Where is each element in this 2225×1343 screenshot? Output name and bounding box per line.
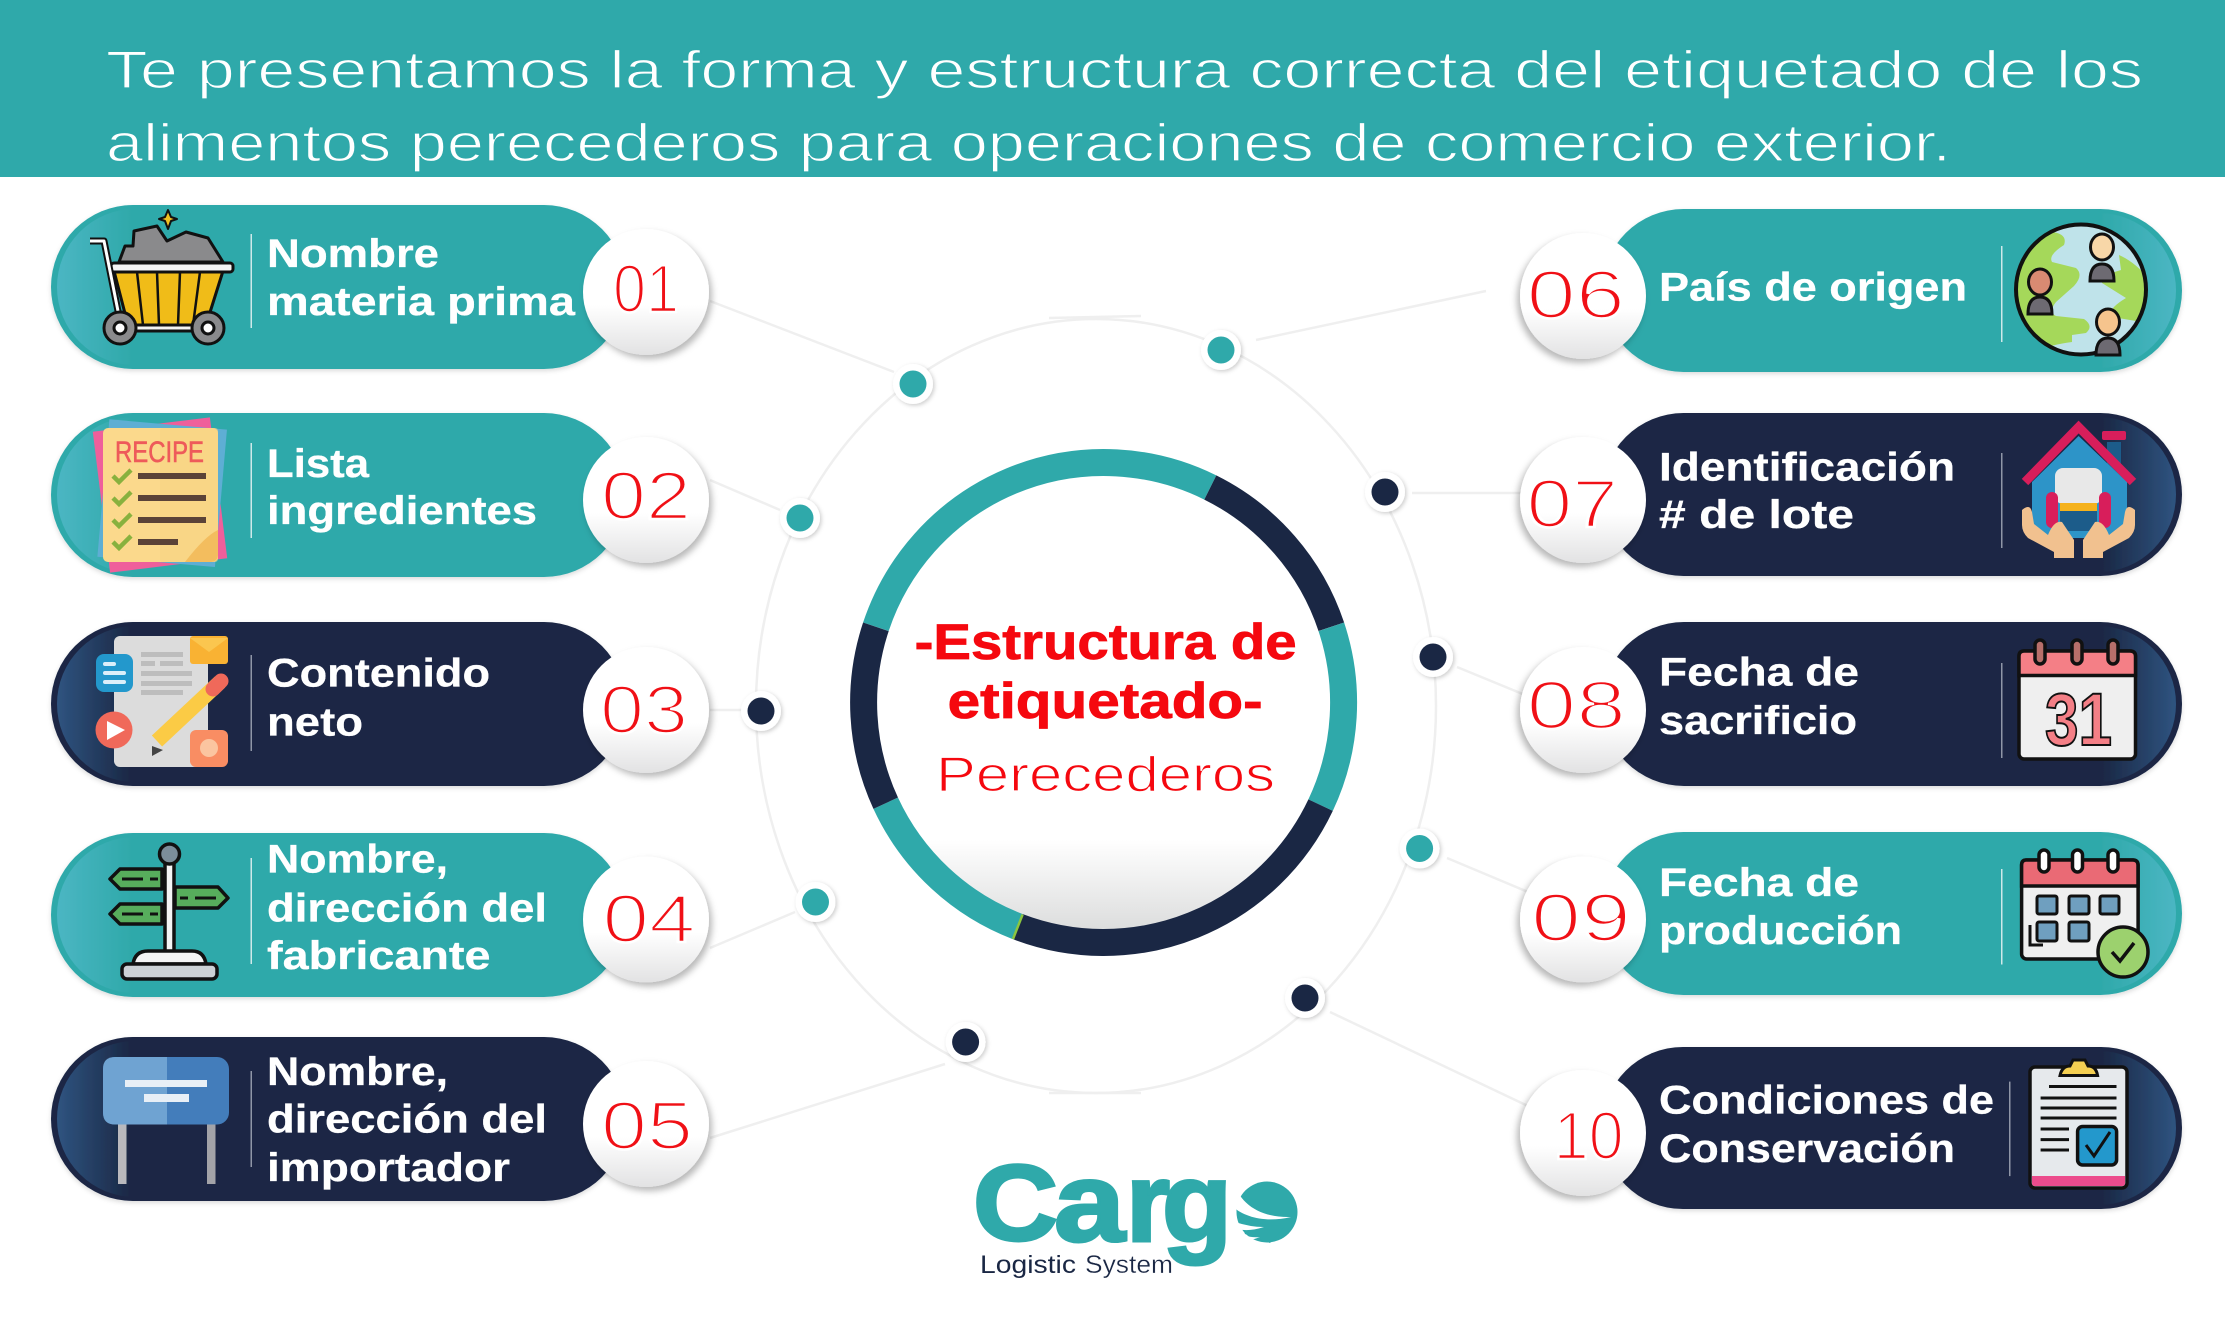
- outer orbit and connector lines: [710, 291, 1540, 1138]
- orbit dots: [741, 330, 1453, 1062]
- divider 07: [2001, 453, 2002, 548]
- header text: alimentos perecederos para operaciones de comercio exterior.: [106, 114, 1951, 173]
- central subtitle: Perecederos: [936, 748, 1275, 802]
- icon: calendar with check: [2022, 850, 2148, 977]
- pill 09: [1602, 832, 2182, 995]
- label 03: neto: [267, 700, 363, 744]
- pill 07: [1602, 413, 2182, 576]
- label 02: Lista: [267, 442, 370, 486]
- pill 04: [51, 833, 626, 997]
- central circle: [864, 463, 1344, 942]
- icon: signpost: [110, 844, 228, 979]
- label 09: producción: [1659, 909, 1902, 953]
- divider 06: [2001, 246, 2002, 342]
- pill 02: [51, 413, 626, 577]
- number badge 05: [583, 1061, 709, 1187]
- label 05: importador: [267, 1146, 510, 1190]
- logo wordmark: a: [1054, 1140, 1126, 1265]
- header text: Te presentamos la forma y estructura correcta del etiquetado de los: [106, 41, 2143, 100]
- label 09: [1659, 861, 1902, 953]
- icon: calendar 31: 31: [2045, 678, 2112, 761]
- divider 05: [250, 1071, 252, 1167]
- item 09: [1520, 832, 2182, 995]
- number badge 07: 07: [1526, 466, 1618, 542]
- central title: etiquetado-: [948, 673, 1263, 729]
- label 05: Nombre,: [267, 1050, 448, 1094]
- number badge 10: 10: [1554, 1098, 1624, 1174]
- logo wordmark: g: [1162, 1140, 1232, 1265]
- item 07: [1520, 413, 2182, 576]
- pill 06: [1602, 209, 2182, 372]
- icon: recipe sheet: [93, 417, 227, 573]
- label 04: dirección del: [267, 887, 547, 931]
- number badge 04: 04: [602, 881, 696, 957]
- icon: globe with people: [2010, 224, 2150, 355]
- pill 08: [1602, 622, 2182, 786]
- label 02: [267, 442, 537, 533]
- number badge 03: 03: [600, 672, 688, 748]
- item 04: [51, 833, 709, 997]
- number badge 02: [583, 437, 709, 563]
- logo tagline: System: [1085, 1251, 1173, 1279]
- number badge 08: [1520, 647, 1646, 773]
- number badge 06: [1520, 233, 1646, 359]
- number badge 01: [583, 229, 709, 355]
- header banner: [0, 0, 2225, 177]
- icon: content document: [96, 636, 228, 767]
- divider 08: [2001, 663, 2002, 758]
- header text: [106, 41, 2143, 173]
- label 05: [267, 1050, 547, 1190]
- divider 04: [250, 858, 252, 964]
- pill 10: [1602, 1047, 2182, 1209]
- item 08: [1520, 622, 2182, 786]
- divider 10: [2009, 1082, 2010, 1176]
- icon: mine cart: [90, 210, 233, 344]
- label 07: # de lote: [1659, 493, 1854, 537]
- item 05: [51, 1037, 709, 1201]
- logo: [973, 1140, 1298, 1279]
- label 08: sacrificio: [1659, 699, 1857, 743]
- divider 03: [250, 655, 252, 751]
- icon: blue road sign: [103, 1057, 229, 1184]
- number badge 06: 06: [1526, 257, 1625, 333]
- logo wordmark: r: [1126, 1140, 1170, 1265]
- label 03: [267, 652, 490, 744]
- number badge 05: 05: [601, 1088, 693, 1164]
- logo tagline: [980, 1251, 1173, 1279]
- label 04: fabricante: [267, 934, 490, 978]
- number badge 09: [1520, 856, 1646, 982]
- icon: calendar 31: [2019, 640, 2136, 761]
- icon: recipe sheet: RECIPE: [115, 436, 204, 469]
- divider 01: [250, 234, 252, 328]
- segmented ring: [864, 463, 1344, 942]
- divider 09: [2001, 869, 2002, 964]
- label 03: Contenido: [267, 652, 490, 696]
- label 07: [1659, 446, 1955, 537]
- number badge 04: [583, 856, 709, 982]
- label 10: [1659, 1078, 1994, 1171]
- item 06: [1520, 209, 2182, 372]
- central title: [915, 614, 1297, 729]
- label 01: materia prima: [267, 280, 576, 324]
- pill 05: [51, 1037, 626, 1201]
- label 08: [1659, 651, 1859, 743]
- item 03: [51, 622, 709, 786]
- central title: -Estructura de: [915, 614, 1297, 670]
- label 06: País de origen: [1659, 266, 1967, 310]
- icon: clipboard checklist: [2030, 1060, 2127, 1188]
- divider 02: [250, 443, 252, 538]
- label 02: ingredientes: [267, 489, 537, 533]
- icon: house in hands: [2022, 427, 2135, 558]
- label 07: Identificación: [1659, 446, 1955, 490]
- number badge 07: [1520, 437, 1646, 563]
- label 05: dirección del: [267, 1098, 547, 1142]
- logo tagline: Logistic: [980, 1251, 1076, 1279]
- number badge 02: 02: [601, 458, 691, 534]
- label 04: [267, 838, 547, 978]
- logo globe with wings: [1233, 1178, 1298, 1243]
- label 01: Nombre: [267, 232, 439, 276]
- item 02: [51, 413, 709, 577]
- circle face: [874, 472, 1334, 932]
- number badge 08: 08: [1526, 668, 1626, 744]
- logo wordmark: C: [973, 1142, 1058, 1263]
- number badge 01: 01: [613, 251, 679, 327]
- number badge 09: 09: [1531, 880, 1631, 956]
- pill 03: [51, 622, 626, 786]
- label 08: Fecha de: [1659, 651, 1859, 695]
- logo wordmark: [973, 1140, 1232, 1265]
- label 01: [267, 232, 576, 324]
- pill 01: [51, 205, 626, 369]
- number badge 10: [1520, 1070, 1646, 1196]
- label 10: Conservación: [1659, 1127, 1955, 1171]
- label 10: Condiciones de: [1659, 1078, 1994, 1122]
- number badge 03: [583, 647, 709, 773]
- label 04: Nombre,: [267, 838, 448, 882]
- item 01: [51, 205, 709, 369]
- item 10: [1520, 1047, 2182, 1209]
- label 09: Fecha de: [1659, 861, 1859, 905]
